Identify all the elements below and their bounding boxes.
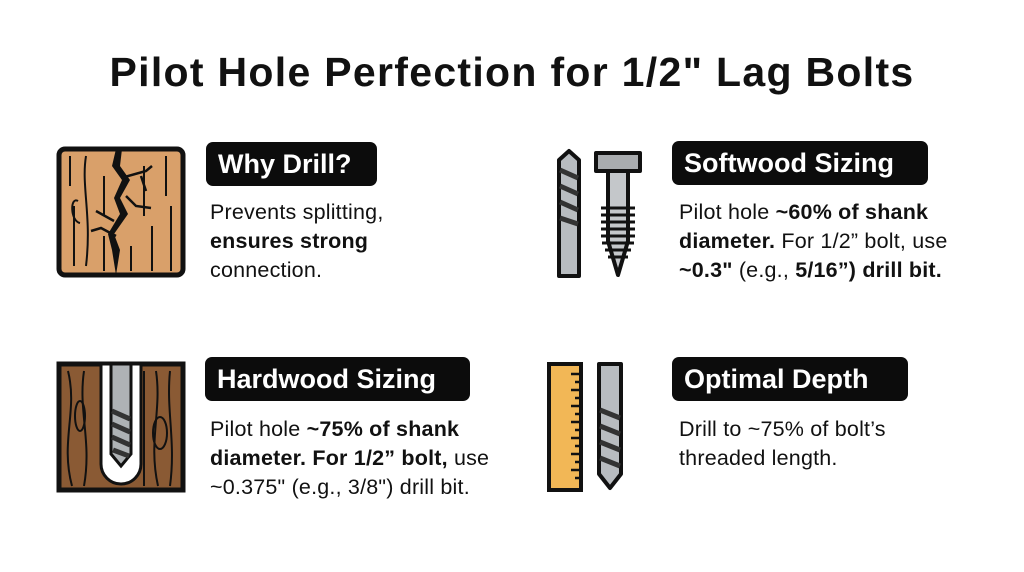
heading: Optimal Depth [672,357,908,401]
text: hardwood: Pilot hole ~75% of shank [210,417,459,441]
heading: Hardwood Sizing [205,357,470,401]
text: hardwood: diameter. For 1/2” bolt, use [210,446,489,470]
text: why drill [210,200,384,282]
text: why drill: Prevents splitting, [210,200,384,224]
text: softwood [679,200,948,282]
text: depth: threaded length. [679,446,838,470]
text: hardwood: ~0.375" (e.g., 3/8") drill bit. [210,475,470,499]
heading: Optimal Depth: Optimal Depth [684,364,869,394]
icon: hardwood with drill [56,362,186,492]
icon: drill bit and lag bolt [557,148,642,278]
heading: Why Drill: Why Drill? [218,149,352,179]
text: softwood: ~0.3" (e.g., 5/16”) drill bit. [679,258,942,282]
heading: Why Drill [206,142,377,186]
text: softwood: diameter. For 1/2” bolt, use [679,229,948,253]
text: why drill: ensures strong [210,229,368,253]
text: hardwood [210,417,489,499]
heading: Hardwood Sizing: Hardwood Sizing [217,364,436,394]
icon: cracked wood [56,146,186,278]
heading: Softwood Sizing: Softwood Sizing [684,148,894,178]
text: depth: Drill to ~75% of bolt’s [679,417,886,441]
title: Pilot Hole Perfection for 1/2" Lag Bolts [110,49,914,95]
heading: Softwood Sizing [672,141,928,185]
icon: ruler and drill [547,362,623,492]
text: softwood: Pilot hole ~60% of shank [679,200,928,224]
text: depth [679,417,886,470]
text: why drill: connection. [210,258,322,282]
